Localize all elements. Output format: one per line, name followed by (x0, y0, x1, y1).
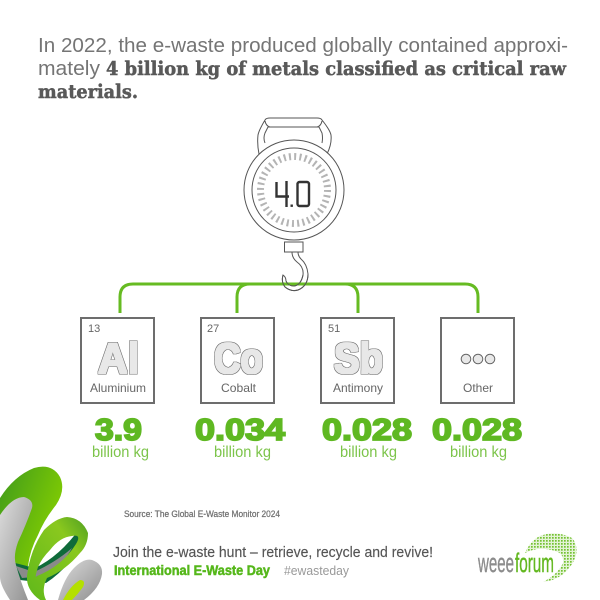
source note: Source: The Global E-Waste Monitor 2024 (124, 509, 280, 519)
value: cobalt (195, 412, 286, 461)
element card: aluminium: Aluminium (90, 381, 146, 395)
value: antimony (322, 412, 412, 461)
element card: antimony: 51 (328, 323, 340, 335)
swirl logo (0, 467, 102, 600)
element card: aluminium (81, 318, 154, 403)
weeeforum logo (477, 533, 576, 582)
dial ticks (260, 156, 328, 224)
dark inner band (15, 528, 85, 583)
element card: other: Other (463, 381, 493, 395)
campaign name: International E-Waste Day (114, 563, 270, 578)
element card: aluminium: Al (98, 335, 139, 383)
grey band (0, 497, 32, 600)
weeeforum logo: forum (515, 548, 554, 578)
heading: materials. (38, 81, 138, 103)
lime inner band (63, 580, 84, 600)
hook (282, 252, 308, 291)
logo leaf (525, 533, 576, 582)
element card: cobalt: Cobalt (221, 381, 257, 395)
hook tip over connector (282, 274, 308, 291)
call to action: Join the e-waste hunt – retrieve, recycle and revive! (113, 544, 433, 561)
scale dial (244, 140, 344, 240)
outer green band (0, 467, 62, 566)
middle green ring (27, 517, 88, 600)
value: antimony: 0.028 (322, 412, 412, 447)
heading: In 2022, the e-waste produced globally contained approxi- (38, 35, 568, 57)
element card: antimony: Sb (334, 335, 383, 383)
digital readout 4.0 (276, 181, 309, 207)
element card: aluminium: 13 (88, 323, 100, 335)
inner grey sliver (16, 548, 72, 578)
heading (38, 35, 568, 103)
value: aluminium (92, 412, 149, 461)
logo wordmark: weee (477, 548, 514, 578)
value: antimony: billion kg (340, 444, 397, 461)
value: other: 0.028 (432, 412, 522, 447)
element card: antimony (321, 318, 394, 403)
icon: hanging scale (244, 118, 344, 291)
element card: other (441, 318, 514, 403)
scale handle (258, 118, 331, 154)
heading: 4 billion kg of metals classified as critical raw (106, 58, 567, 80)
element card: antimony: Antimony (333, 381, 383, 395)
hook neck (284, 242, 303, 252)
value: aluminium: billion kg (92, 444, 149, 461)
element card: cobalt (201, 318, 274, 403)
value: aluminium: 3.9 (95, 412, 142, 447)
element card: cobalt: Co (214, 335, 263, 383)
heading: mately (38, 58, 100, 80)
connector lines (120, 284, 478, 313)
value: cobalt: 0.034 (195, 412, 286, 447)
element card: cobalt: 27 (207, 323, 219, 335)
right grey band (58, 560, 102, 600)
value: other: billion kg (450, 444, 507, 461)
value: other (432, 412, 522, 461)
hashtag: #ewasteday (284, 563, 349, 578)
value: cobalt: billion kg (214, 444, 271, 461)
